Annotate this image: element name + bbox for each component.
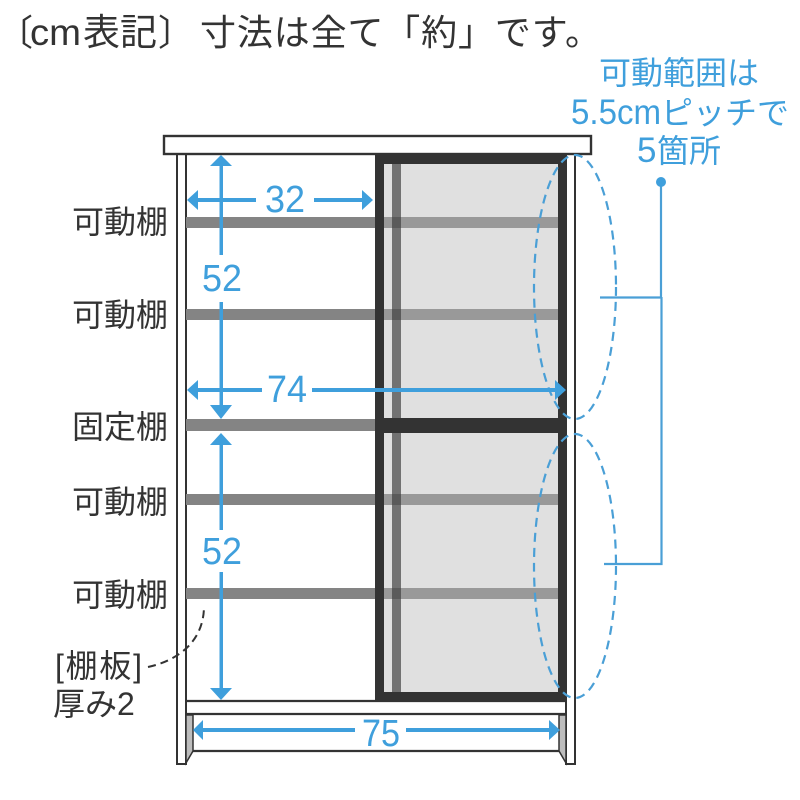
callout: adjustable range text: 5 xyxy=(637,131,656,170)
shelf labels: 可動棚 xyxy=(72,204,168,240)
title: 〕 xyxy=(158,12,194,53)
callout: adjustable range text: 可動範囲は xyxy=(599,55,759,91)
shelf labels: 可動棚 xyxy=(72,484,168,520)
dimension arrows xyxy=(187,155,566,740)
glass door xyxy=(375,154,567,701)
arrow: 52 lower xyxy=(210,433,232,700)
shelves xyxy=(186,217,375,599)
right post xyxy=(566,153,575,764)
plinth xyxy=(186,701,566,751)
top board xyxy=(164,136,591,154)
arrow: 32 xyxy=(187,190,373,210)
dimension numbers: 32 xyxy=(265,179,305,221)
dimension numbers: 75 xyxy=(362,713,400,755)
shelf unit outline xyxy=(164,136,591,764)
left leg xyxy=(186,715,193,763)
dimension numbers: 74 xyxy=(267,369,307,411)
left post xyxy=(177,153,186,764)
callout: adjustable range text: ピッチで xyxy=(661,95,789,131)
shelf labels: 可動棚 xyxy=(72,297,168,333)
dimension numbers: 52 xyxy=(202,258,242,300)
arrow: 75 xyxy=(193,720,560,740)
arrow: 52 upper xyxy=(210,155,232,419)
shelf labels xyxy=(72,204,168,613)
shelf thickness note xyxy=(53,648,142,722)
callout: adjustable range text xyxy=(571,55,789,170)
right leg xyxy=(559,715,566,763)
title xyxy=(0,12,601,53)
callout: adjustable range text: 箇所 xyxy=(657,133,721,169)
shelf thickness note: [棚板] xyxy=(55,648,142,684)
bracket callout line xyxy=(600,177,666,564)
callout: adjustable range text: 5.5cm xyxy=(571,93,661,132)
dashed ellipses: adjustable range xyxy=(534,155,616,698)
dimension numbers: 52 xyxy=(202,531,242,573)
shelf labels: 固定棚 xyxy=(72,409,168,445)
title: cm xyxy=(30,12,81,53)
shelf thickness note: 厚み2 xyxy=(53,686,135,722)
dimension numbers xyxy=(202,179,400,755)
leader line: shelf thickness xyxy=(148,606,204,667)
shelf labels: 可動棚 xyxy=(72,577,168,613)
title: 表記 xyxy=(83,12,157,53)
arrow: 74 xyxy=(187,380,566,400)
title: 寸法は全て「約」です。 xyxy=(200,12,601,53)
